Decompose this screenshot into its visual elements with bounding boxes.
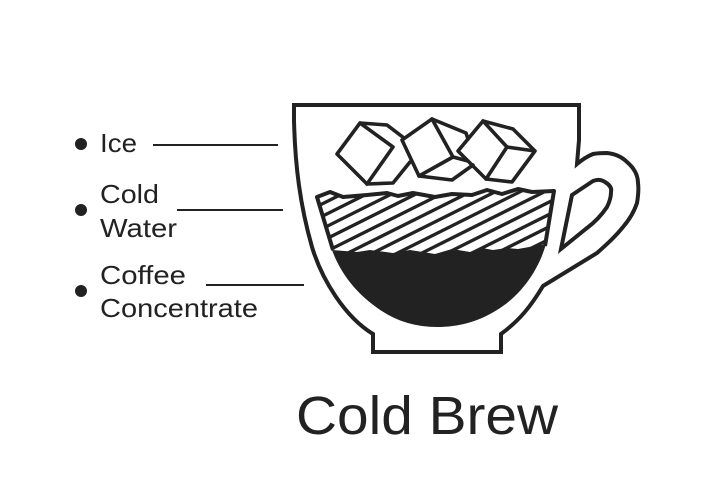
- label text: Water: [100, 213, 177, 243]
- leader line: [206, 284, 304, 286]
- water hatching: [320, 191, 551, 253]
- label: Ice: [75, 128, 278, 158]
- bullet: [75, 204, 87, 216]
- ice cube right: [458, 121, 535, 182]
- label: Cold Water: [75, 179, 283, 243]
- label text: Ice: [100, 128, 137, 158]
- water outline: [317, 189, 554, 250]
- title: Cold Brew: [296, 386, 559, 446]
- cup body and handle: [294, 105, 638, 352]
- handle opening: [561, 180, 611, 249]
- ice cube middle: [402, 119, 473, 180]
- leader line: [153, 144, 278, 146]
- bullet: [75, 285, 87, 297]
- ice cube left: [337, 123, 410, 184]
- leader line: [177, 209, 283, 211]
- label text: Coffee: [100, 260, 186, 290]
- cold water layer: [315, 187, 556, 253]
- infographic: cold brew cup diagram: [75, 103, 640, 435]
- ice cubes: [337, 119, 535, 184]
- label text: Cold: [100, 179, 159, 209]
- label: Coffee Concentrate: [75, 260, 304, 323]
- bullet: [75, 138, 87, 150]
- label text: Concentrate: [100, 293, 258, 323]
- cup outline: [294, 105, 638, 352]
- coffee concentrate layer: [332, 244, 546, 327]
